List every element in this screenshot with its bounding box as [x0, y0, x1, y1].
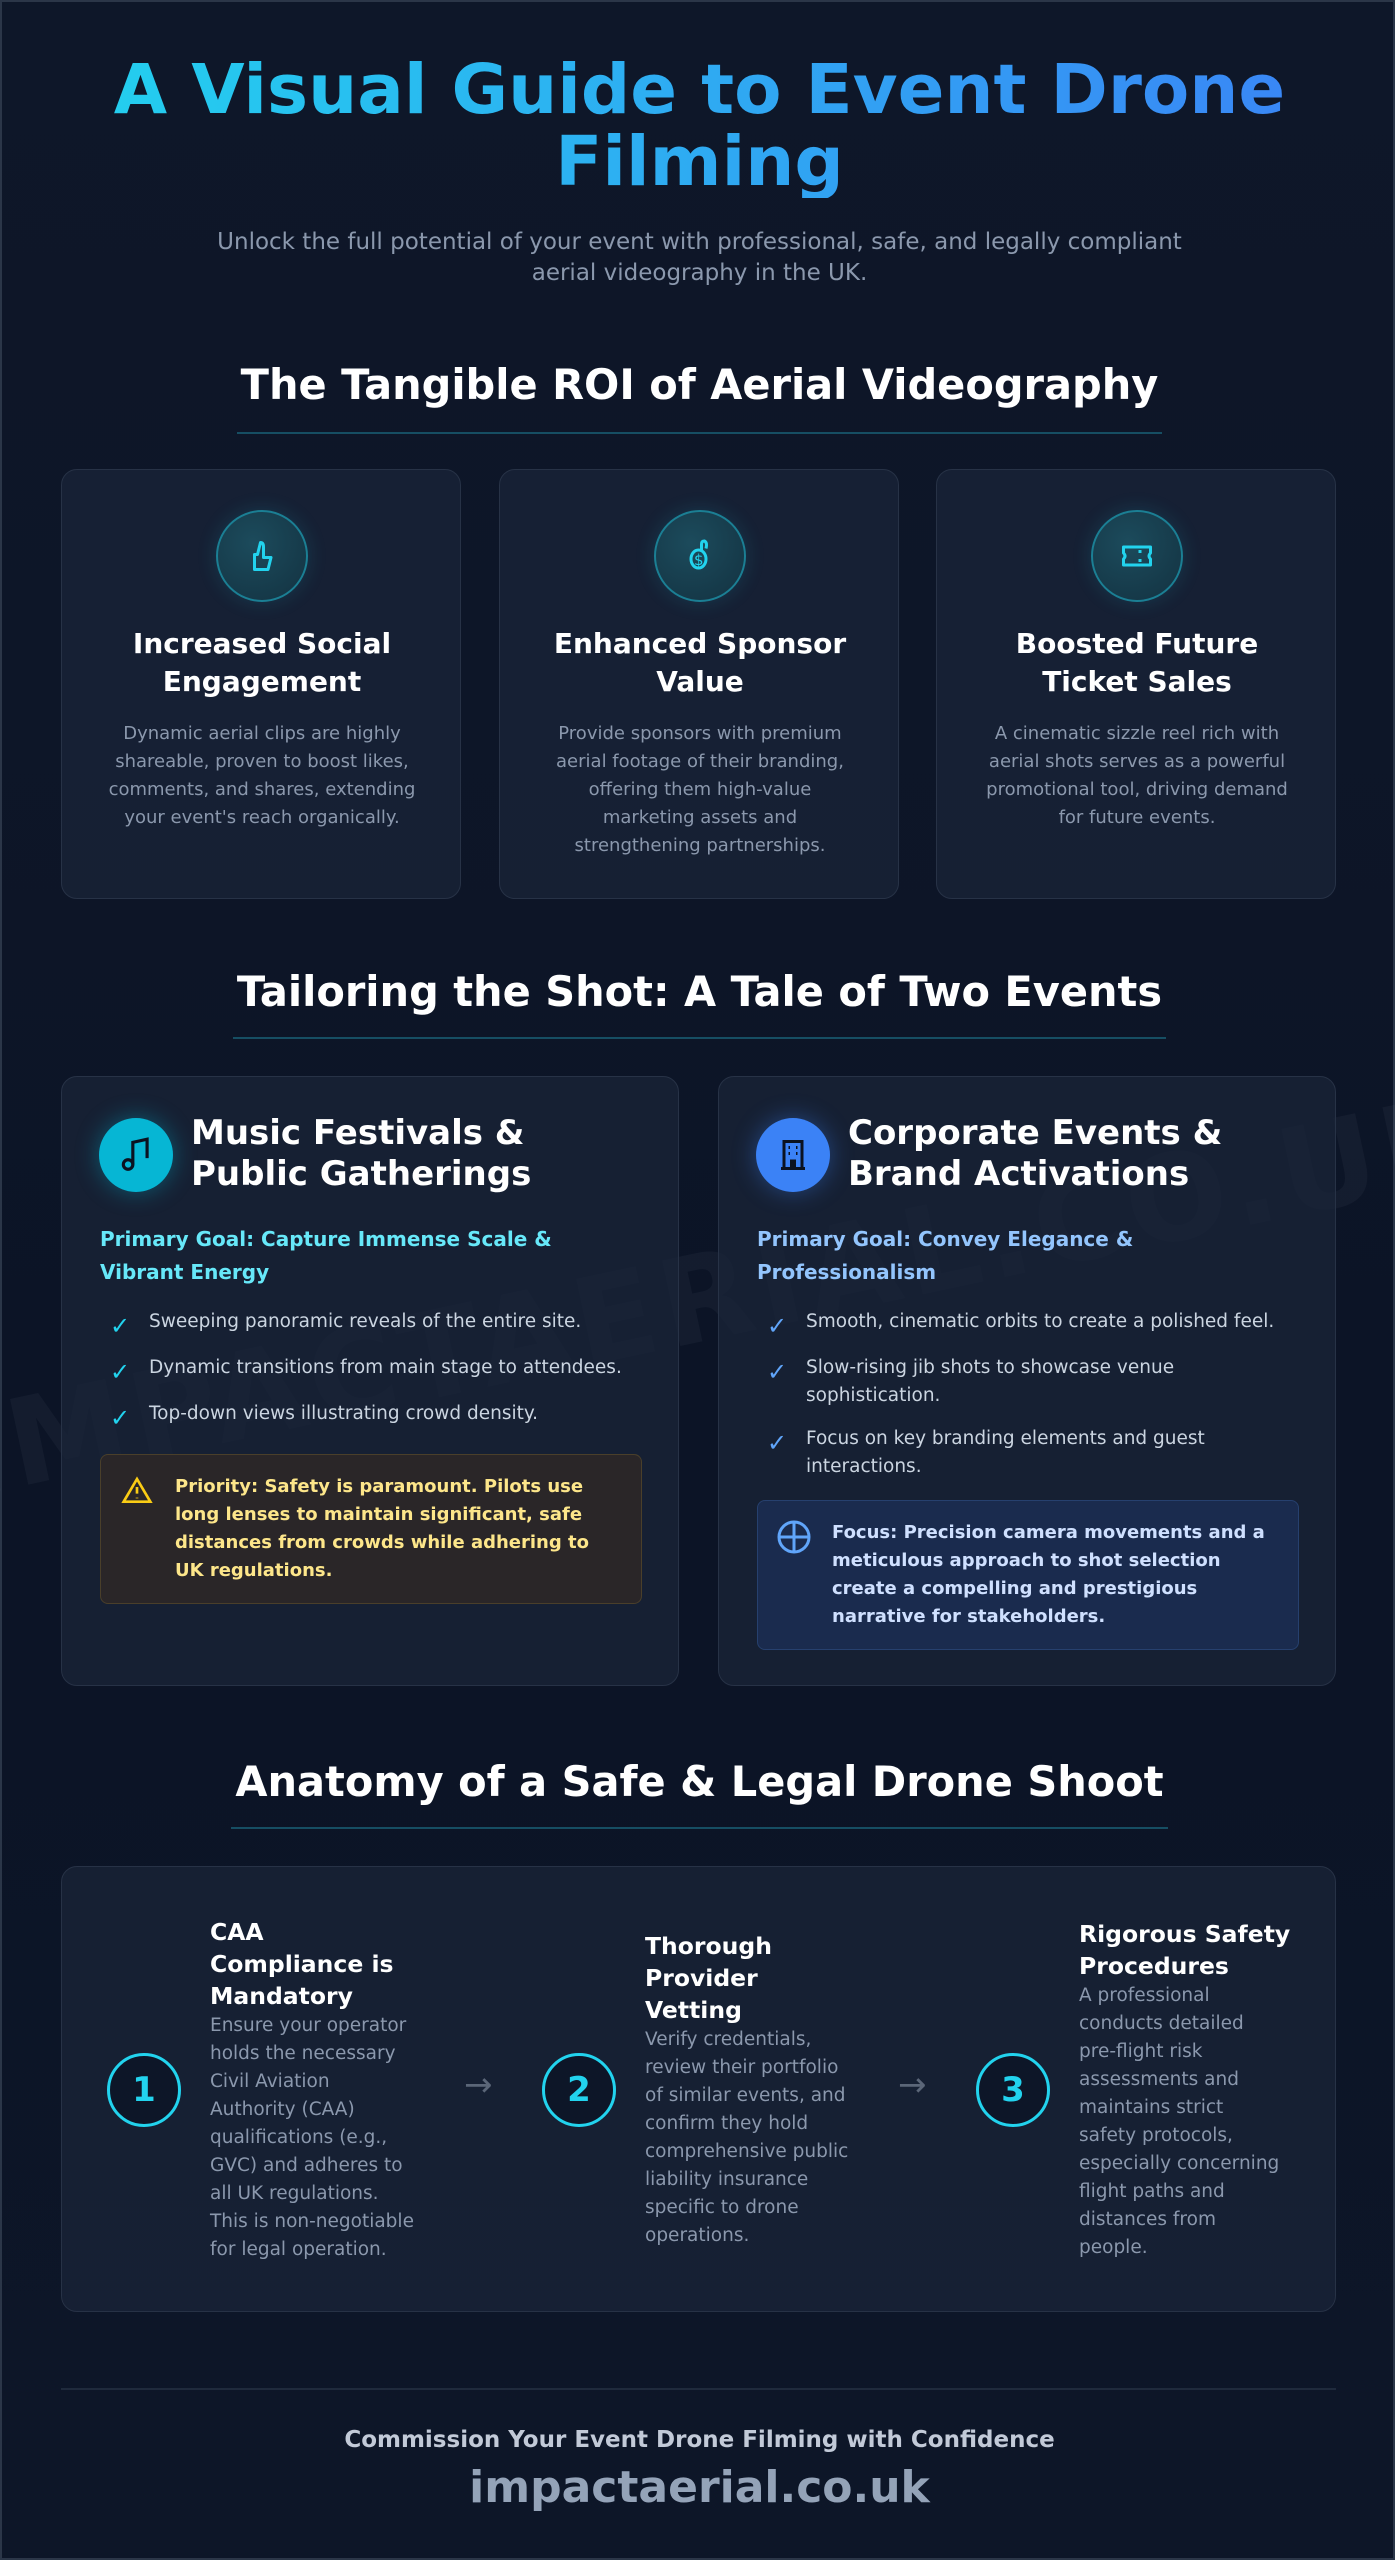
- card: social engagement: [61, 469, 461, 899]
- warning callout: Priority: Safety is paramount. Pilots use long lenses to maintain significant, safe distances from crowds while adhering to UK regulations.: [175, 1476, 589, 1581]
- bullet: [110, 1403, 538, 1432]
- bullet: ✓: [767, 1312, 787, 1340]
- focus callout: [757, 1500, 1299, 1650]
- footer tagline: Commission Your Event Drone Filming with Confidence: [344, 2427, 1055, 2453]
- panel: corporate events: [718, 1076, 1336, 1686]
- icon: music: [99, 1118, 173, 1192]
- step 2: 2: [567, 2070, 591, 2110]
- icon: warning: [121, 1476, 153, 1503]
- subtitle: Unlock the full potential of your event with professional, safe, and legally compliant aerial videography in the UK.: [217, 229, 1182, 286]
- step 3: Rigorous Safety Procedures: [1079, 1920, 1290, 1980]
- title: [22, 54, 1377, 198]
- bullet: ✓: [110, 1404, 130, 1432]
- step 3: 3: [1001, 2070, 1025, 2110]
- bullet: [110, 1357, 622, 1386]
- step 1: CAA Compliance is Mandatory: [210, 1918, 394, 2010]
- heading: two events: Tailoring the Shot: A Tale of Two Events: [237, 967, 1162, 1016]
- card title: Enhanced Sponsor Value: [554, 627, 846, 698]
- panel title: Corporate Events &: [848, 1113, 1222, 1153]
- step 3: A professional conducts detailed pre-flight risk assessments and maintains strict safety protocols, especially concerning flight paths and distances from people.: [1079, 1985, 1279, 2258]
- warning callout: [100, 1454, 642, 1604]
- bullet: Focus on key branding elements and guest interactions.: [806, 1428, 1205, 1477]
- panel title: [848, 1113, 1222, 1194]
- bullet: ✓: [767, 1429, 787, 1457]
- step 2: [542, 1932, 848, 2246]
- bullet: Sweeping panoramic reveals of the entire site.: [149, 1311, 581, 1332]
- panel title: Public Gatherings: [191, 1154, 531, 1194]
- primary goal: Primary Goal: Capture Immense Scale & Vibrant Energy: [100, 1227, 552, 1284]
- step 1: 1: [132, 2070, 156, 2110]
- panel title: Brand Activations: [848, 1154, 1189, 1194]
- panel title: [191, 1113, 531, 1194]
- card title: Increased Social Engagement: [133, 627, 391, 698]
- title: Filming: [555, 122, 844, 202]
- bullet: ✓: [767, 1358, 787, 1386]
- card text: Provide sponsors with premium aerial footage of their branding, offering them high-value marketing assets and strengthening partnerships.: [556, 723, 844, 856]
- bullet: [767, 1311, 1274, 1340]
- bullet: Dynamic transitions from main stage to attendees.: [149, 1357, 622, 1378]
- arrow: →: [898, 2065, 926, 2105]
- panel: music festivals: [61, 1076, 679, 1686]
- icon: crosshair: [778, 1520, 810, 1554]
- card: ticket sales: [936, 469, 1336, 899]
- icon: money: [654, 510, 746, 602]
- step 1: Ensure your operator holds the necessary Civil Aviation Authority (CAA) qualifications (e.g., GVC) and adheres to all UK regulations. This is non-negotiable for legal operation.: [210, 2015, 414, 2260]
- primary goal: Primary Goal: Convey Elegance & Professionalism: [757, 1227, 1133, 1284]
- icon: building: [756, 1118, 830, 1192]
- step 2: Thorough Provider Vetting: [645, 1932, 772, 2024]
- step 3: [976, 1920, 1290, 2258]
- card text: Dynamic aerial clips are highly shareable, proven to boost likes, comments, and shares, extending your event's reach organically.: [109, 723, 415, 828]
- panel: steps: [61, 1866, 1336, 2312]
- bullet: [110, 1311, 581, 1340]
- card title: Boosted Future Ticket Sales: [1016, 627, 1258, 698]
- title: A Visual Guide to Event Drone: [114, 50, 1285, 130]
- heading: anatomy: Anatomy of a Safe & Legal Drone Shoot: [235, 1757, 1164, 1806]
- arrow: →: [464, 2065, 492, 2105]
- bullet: Slow-rising jib shots to showcase venue sophistication.: [806, 1357, 1174, 1406]
- bullet: ✓: [110, 1312, 130, 1340]
- footer domain: impactaerial.co.uk: [469, 2462, 930, 2513]
- bullet: ✓: [110, 1358, 130, 1386]
- bullet: Top-down views illustrating crowd density.: [149, 1403, 538, 1424]
- heading: ROI: The Tangible ROI of Aerial Videography: [241, 360, 1158, 409]
- bullet: Smooth, cinematic orbits to create a polished feel.: [806, 1311, 1274, 1332]
- step 2: Verify credentials, review their portfolio of similar events, and confirm they hold comprehensive public liability insurance specific to drone operations.: [645, 2029, 848, 2246]
- focus callout: Focus: Precision camera movements and a meticulous approach to shot selection create a compelling and prestigious narrative for stakeholders.: [832, 1522, 1265, 1627]
- step 1: [107, 1918, 414, 2260]
- panel title: Music Festivals &: [191, 1113, 524, 1153]
- icon: ticket: [1091, 510, 1183, 602]
- icon: thumbs up: [216, 510, 308, 602]
- card text: A cinematic sizzle reel rich with aerial shots serves as a powerful promotional tool, driving demand for future events.: [986, 723, 1288, 828]
- card: sponsor value: [499, 469, 899, 899]
- icon: money: $: [694, 551, 704, 569]
